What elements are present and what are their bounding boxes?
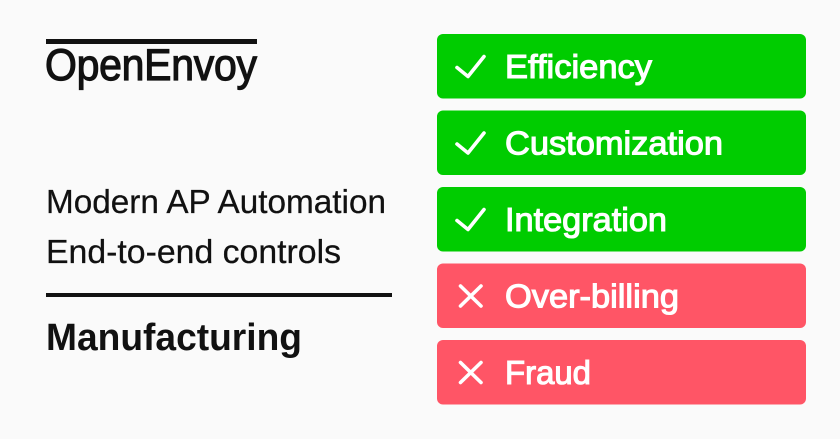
icon: check bbox=[457, 210, 484, 230]
row: Integration bbox=[437, 187, 806, 252]
text block: tagline: End-to-end controls bbox=[46, 233, 341, 270]
icon: check bbox=[457, 133, 484, 153]
row: Efficiency bbox=[437, 34, 806, 98]
label: Integration: Integration bbox=[505, 201, 667, 238]
icon: check bbox=[457, 56, 484, 76]
label: Fraud: Fraud bbox=[505, 354, 591, 391]
logo: OpenEnvoy: OpenEnvoy bbox=[45, 41, 258, 90]
panel: benefits and risks list bbox=[437, 34, 806, 404]
label: Customization: Customization bbox=[505, 124, 723, 162]
row: Fraud bbox=[437, 340, 806, 404]
icon: cross bbox=[460, 286, 481, 306]
row: Customization bbox=[437, 110, 806, 175]
label: Over-billing: Over-billing bbox=[505, 278, 679, 314]
text block: tagline bbox=[46, 183, 386, 270]
heading: Manufacturing: Manufacturing bbox=[46, 317, 302, 359]
divider rule bbox=[46, 293, 392, 297]
row: Over-billing bbox=[437, 264, 806, 328]
icon: cross bbox=[460, 362, 481, 382]
label: Efficiency: Efficiency bbox=[505, 48, 653, 85]
text block: tagline: Modern AP Automation bbox=[46, 183, 386, 220]
